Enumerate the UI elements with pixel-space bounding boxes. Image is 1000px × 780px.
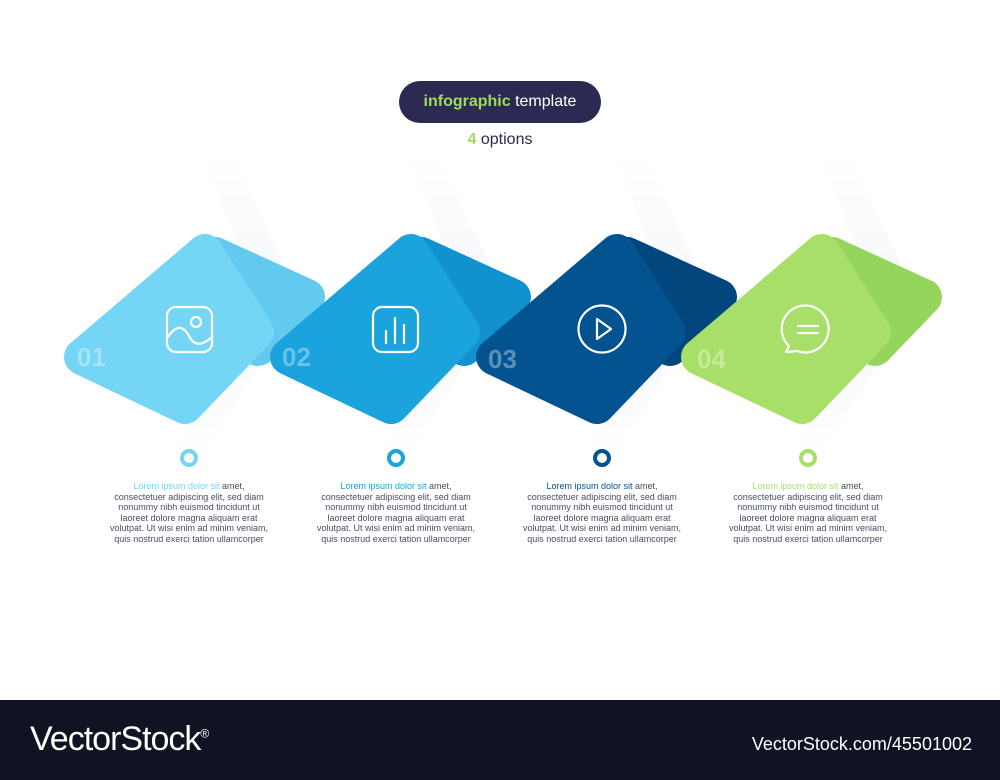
text block 2: nonummy nibh euismod tincidunt ut	[325, 502, 467, 512]
text block 2: consectetuer adipiscing elit, sed diam	[321, 492, 471, 502]
text block 2: laoreet dolore magna aliquam erat	[327, 512, 465, 522]
text block 4	[729, 481, 887, 544]
text block 3: consectetuer adipiscing elit, sed diam	[527, 492, 677, 502]
marker 1	[182, 451, 196, 465]
shadows	[170, 150, 918, 460]
text block 1: nonummy nibh euismod tincidunt ut	[118, 502, 260, 512]
text block 3: volutpat. Ut wisi enim ad minim veniam,	[523, 523, 681, 533]
marker 2	[389, 451, 403, 465]
text block 4: volutpat. Ut wisi enim ad minim veniam,	[729, 523, 887, 533]
text block 4: nonummy nibh euismod tincidunt ut	[737, 502, 879, 512]
footer logo: VectorStock®	[30, 720, 208, 758]
text block 4: quis nostrud exerci tation ullamcorper	[733, 534, 883, 544]
text block 4: Lorem ipsum dolor sit amet,	[752, 481, 864, 491]
marker 4	[801, 451, 815, 465]
footer band	[0, 700, 1000, 780]
icon: chat	[782, 305, 829, 352]
text block 1: quis nostrud exerci tation ullamcorper	[114, 534, 264, 544]
text block 2: Lorem ipsum dolor sit amet,	[340, 481, 452, 491]
text block 1: laoreet dolore magna aliquam erat	[120, 512, 258, 522]
text block 3: Lorem ipsum dolor sit amet,	[546, 481, 658, 491]
text block 3	[523, 481, 681, 544]
marker 3	[595, 451, 609, 465]
number 02: 02	[282, 342, 311, 372]
number 04: 04	[697, 344, 726, 374]
text block 4: laoreet dolore magna aliquam erat	[739, 512, 877, 522]
text block 3: nonummy nibh euismod tincidunt ut	[531, 502, 673, 512]
text block 1: Lorem ipsum dolor sit amet,	[133, 481, 245, 491]
item 4 shape	[699, 252, 924, 406]
icon: bar chart	[373, 307, 418, 352]
text block 3: quis nostrud exerci tation ullamcorper	[527, 534, 677, 544]
icon: image	[167, 307, 212, 352]
item 1 shape	[82, 252, 307, 406]
text block 2: quis nostrud exerci tation ullamcorper	[321, 534, 471, 544]
footer url: VectorStock.com/45501002	[752, 734, 972, 754]
text block 1: volutpat. Ut wisi enim ad minim veniam,	[110, 523, 268, 533]
item 3 shape	[494, 252, 719, 406]
title pill: infographic template	[424, 93, 576, 110]
text block 1	[110, 481, 268, 544]
text block 3: laoreet dolore magna aliquam erat	[533, 512, 671, 522]
text block 4: consectetuer adipiscing elit, sed diam	[733, 492, 883, 502]
icon: play	[578, 306, 626, 352]
number 03: 03	[488, 344, 517, 374]
text block 1: consectetuer adipiscing elit, sed diam	[114, 492, 264, 502]
text block 2	[317, 481, 475, 544]
title pill	[399, 81, 601, 123]
subtitle: 4 options	[468, 131, 532, 148]
item 2 shape	[288, 252, 513, 406]
number 01: 01	[77, 342, 106, 372]
text block 2: volutpat. Ut wisi enim ad minim veniam,	[317, 523, 475, 533]
